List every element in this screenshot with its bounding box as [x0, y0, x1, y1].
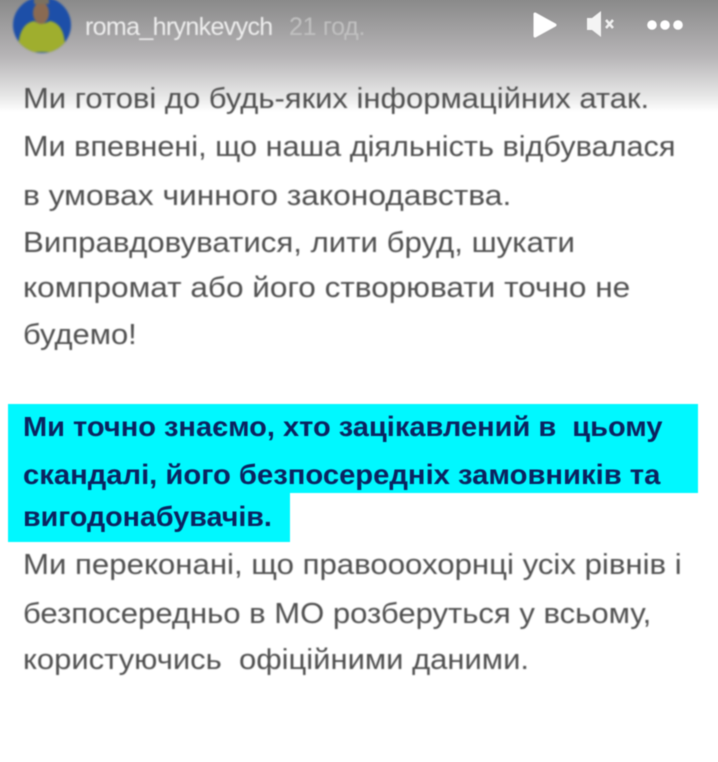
text block: first paragraph	[23, 83, 675, 351]
text block: last paragraph: Ми переконані, що правооохорнці усіх рівнів і	[23, 549, 682, 581]
timestamp: 21 год.	[289, 13, 365, 41]
icon: muted speaker	[586, 10, 614, 37]
text block: first paragraph: Ми готові до будь-яких інформаційних атак.	[23, 83, 649, 115]
text block: last paragraph	[23, 549, 682, 676]
highlighted text block: вигодонабувачів.	[23, 501, 272, 532]
highlighted text block: скандалі, його безпосередніх замовників та	[23, 459, 660, 490]
text block: first paragraph: в умовах чинного законодавства.	[23, 180, 511, 212]
avatar	[12, 0, 72, 54]
text block: first paragraph: компромат або його створювати точно не	[23, 272, 630, 304]
username: roma_hrynkevych	[85, 13, 273, 41]
text block: last paragraph: користуючись офіційними даними.	[23, 644, 529, 676]
icon: more dots	[646, 20, 684, 30]
text block: last paragraph: безпосередньо в МО розберуться у всьому,	[23, 598, 651, 630]
highlighted text block	[23, 411, 663, 533]
highlighted text block: Ми точно знаємо, хто зацікавлений в цьому	[23, 411, 663, 442]
text block: first paragraph: Ми впевнені, що наша діяльність відбувалася	[23, 131, 675, 163]
text block: first paragraph: Виправдовуватися, лити бруд, шукати	[23, 227, 575, 259]
icon: play	[533, 12, 557, 38]
top gradient header	[0, 0, 718, 112]
text block: first paragraph: будемо!	[23, 319, 137, 351]
